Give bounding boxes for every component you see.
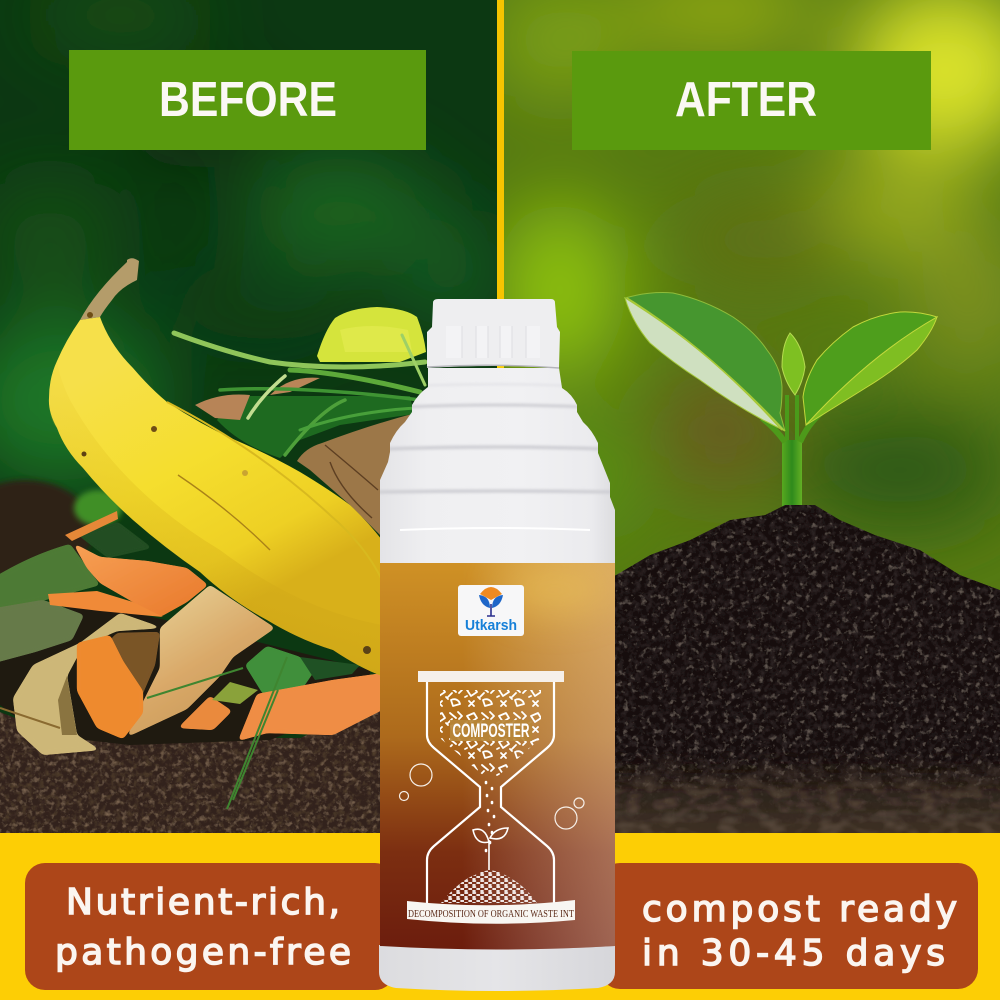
bottle cap: [427, 299, 560, 368]
orange peel lower: [48, 591, 163, 617]
soil: foreground: [0, 712, 380, 833]
ribbon tagline: DECOMPOSITION OF ORGANIC WASTE INT: [408, 909, 574, 920]
small orange peel: [180, 697, 230, 730]
bottle label: [380, 563, 615, 950]
tan peel large: [127, 585, 275, 737]
callout: compost ready: compost ready: [642, 889, 957, 930]
green glow behind banana: [74, 490, 122, 526]
banner: before: [69, 50, 426, 150]
photo panel: after: [490, 0, 1000, 833]
dark leaf: [81, 522, 149, 558]
yellow divider: [497, 0, 504, 310]
greens pile behind banana: [174, 307, 426, 535]
photo panel: before: [0, 0, 500, 833]
orange peel upper: [73, 543, 208, 617]
ribbon tagline: [407, 900, 575, 924]
orange curl: [77, 635, 143, 739]
bubbles: [400, 764, 584, 829]
falling particles: [486, 782, 494, 851]
compost mound: [441, 870, 537, 903]
composter title: COMPOSTER: [452, 721, 530, 742]
lower soil band: [615, 757, 1000, 833]
blurred background soil: [0, 480, 93, 580]
right leaf: [803, 312, 937, 425]
stem: [782, 440, 802, 506]
carrot and vegetable peels: [0, 511, 384, 809]
logo: Utkarsh: Utkarsh: [465, 618, 517, 634]
orange twig: [65, 511, 118, 541]
bottle base: [379, 945, 615, 991]
callout: nutrient rich: [25, 863, 395, 990]
carrot peel right: [238, 673, 384, 741]
brown leaf: [297, 414, 412, 535]
leaf: dull green: [0, 544, 100, 612]
callout: nutrient rich: pathogen-free: [55, 932, 351, 973]
plant seedling: [625, 293, 937, 520]
banner: before: BEFORE: [159, 73, 337, 127]
hourglass graphic: [400, 671, 584, 903]
callout: compost ready: in 30-45 days: [642, 933, 945, 974]
yellow green object: [317, 307, 426, 362]
center bud: [782, 333, 805, 395]
leaf: muted brown green: [0, 600, 84, 664]
dark shadow under pile: [0, 600, 370, 745]
callout: compost ready: [600, 863, 978, 989]
banner: after: AFTER: [675, 73, 817, 127]
left leaf: [625, 293, 785, 431]
seedling: [473, 828, 508, 870]
dark leaves: [217, 396, 414, 458]
green stems: [174, 333, 425, 455]
stems: [147, 657, 287, 809]
logo: Utkarsh: [458, 585, 524, 636]
banner: after: [572, 51, 931, 150]
composter title: [450, 720, 532, 742]
compost waste scraps: [440, 690, 541, 776]
banana: [49, 258, 382, 676]
compost soil mound: [615, 505, 1000, 818]
product bottle: [378, 299, 615, 991]
green leaf bottom: [246, 646, 312, 693]
bottle shoulder: [380, 368, 615, 565]
tan peel left: [13, 613, 163, 755]
callout: nutrient rich: Nutrient-rich,: [66, 882, 340, 923]
